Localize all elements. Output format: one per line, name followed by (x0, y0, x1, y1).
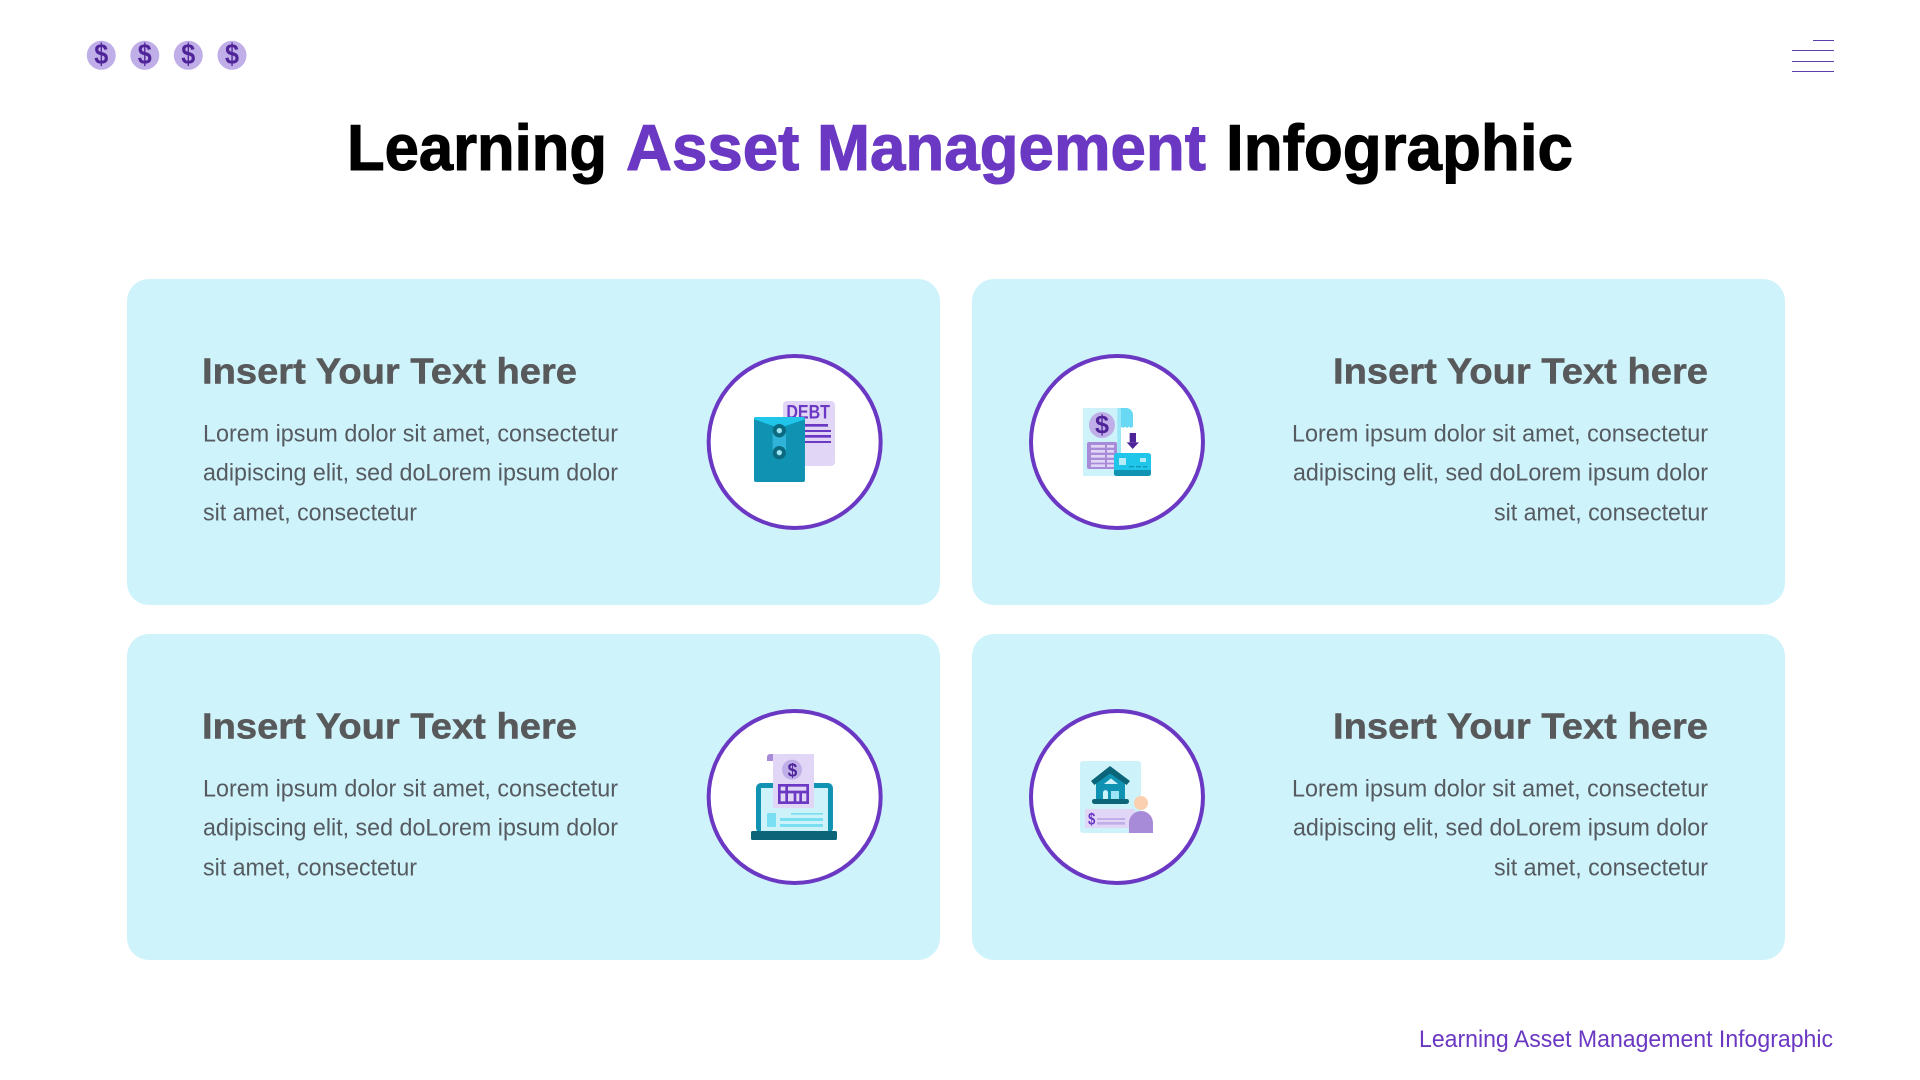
icon row: dollar coins (87, 39, 246, 71)
text block: top left: sit amet, consectetur (203, 500, 417, 526)
icon: dollar coin 3 (174, 39, 203, 71)
icon: dollar coin 4 (218, 39, 246, 71)
text block: bottom left: adipiscing elit, sed doLorem ipsum dolor (203, 814, 618, 842)
footer caption: Learning Asset Management Infographic (1419, 1026, 1833, 1053)
icon: dollar coin 4: $ (225, 39, 239, 71)
icon: debt envelope in circle (709, 356, 881, 528)
text block: bottom right: adipiscing elit, sed doLorem ipsum dolor (1293, 814, 1708, 842)
text block: top left: Lorem ipsum dolor sit amet, consectetur (203, 420, 618, 448)
icon: house, cheque and person in circle: $ (1088, 809, 1096, 828)
heading: bottom right: Insert Your Text here (1333, 706, 1708, 746)
text block: bottom right: Lorem ipsum dolor sit amet, consectetur (1292, 776, 1708, 802)
text block: top right: sit amet, consectetur (1494, 500, 1708, 526)
title: Infographic (1226, 111, 1573, 184)
text block: bottom left (203, 776, 618, 882)
title: Learning (347, 111, 607, 184)
text block: bottom left: Lorem ipsum dolor sit amet, consectetur (203, 776, 618, 802)
heading: top right: Insert Your Text here (1333, 350, 1708, 392)
title (347, 111, 1573, 184)
heading: top left: Insert Your Text here (202, 350, 577, 392)
text block: top left: adipiscing elit, sed doLorem ipsum dolor (203, 460, 618, 486)
icon: menu lines (1792, 40, 1834, 72)
panel: top right (972, 279, 1785, 605)
icon: receipt and card in circle (1031, 356, 1203, 528)
icon: laptop with invoice in circle (709, 711, 881, 883)
panel: bottom left (127, 634, 940, 960)
icon: receipt and card in circle: $ (1095, 410, 1110, 440)
text block: top right: adipiscing elit, sed doLorem ipsum dolor (1293, 460, 1708, 486)
icon: house, cheque and person in circle (1031, 711, 1203, 883)
icon: dollar coin 1: $ (94, 39, 108, 71)
text block: bottom left: sit amet, consectetur (203, 854, 417, 882)
panel: bottom right (972, 634, 1785, 960)
icon: dollar coin 1 (87, 39, 116, 71)
text block: top left (203, 420, 618, 526)
text block: bottom right: sit amet, consectetur (1494, 854, 1708, 882)
icon: dollar coin 3: $ (181, 39, 195, 71)
text block: bottom right (1292, 776, 1708, 882)
panel: top left (127, 279, 940, 605)
text block: top right: Lorem ipsum dolor sit amet, consectetur (1292, 420, 1708, 448)
icon: laptop with invoice in circle: $ (788, 759, 798, 780)
title: Asset Management (626, 111, 1206, 184)
heading: bottom left: Insert Your Text here (202, 706, 577, 746)
text block: top right (1292, 420, 1708, 526)
icon: dollar coin 2: $ (138, 39, 152, 71)
icon: debt envelope in circle: DEBT (786, 402, 830, 423)
icon: dollar coin 2 (130, 39, 159, 71)
